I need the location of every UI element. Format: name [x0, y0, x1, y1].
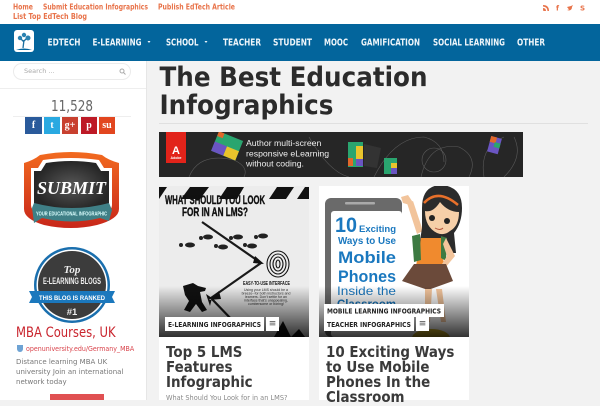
share buttons: t: [50, 120, 54, 131]
social icons top: [543, 4, 585, 12]
ad description: [16, 357, 123, 386]
top links: [13, 2, 235, 21]
navigation labels: MOOC: [324, 38, 348, 48]
device graphics: [348, 142, 381, 168]
navigation labels: SOCIAL LEARNING: [433, 38, 505, 48]
page title: The Best Education: [160, 62, 428, 93]
ad button: [50, 394, 104, 400]
top links: Submit Education Infographics: [43, 2, 148, 12]
card title: Infographic: [166, 373, 253, 391]
card title: [166, 343, 253, 391]
page title: Infographics: [160, 90, 334, 121]
navigation labels: TEACHER: [223, 38, 262, 48]
adobe logo: Adobe: [171, 156, 181, 160]
navigation labels: STUDENT: [273, 38, 312, 48]
navigation labels: [48, 38, 546, 48]
fingerprint: [267, 251, 289, 277]
LMS infographic image: breeze--for both instructors and: [242, 292, 290, 296]
phones illustration: [319, 186, 469, 337]
top bar: [0, 0, 600, 24]
adobe logo: A: [172, 145, 180, 157]
top links: List Top EdTech Blog: [13, 12, 87, 21]
share count: 11,528: [51, 97, 93, 115]
card title: [326, 343, 454, 406]
share buttons: g+: [65, 120, 75, 131]
share buttons: p: [86, 120, 92, 131]
ad title: MBA Courses, UK: [16, 325, 116, 341]
category tag: mobile learning: [324, 304, 444, 317]
tag icon: ≡: [269, 319, 276, 329]
card: LMS features: [159, 186, 309, 400]
navigation labels: SCHOOL: [166, 38, 198, 48]
girl: [401, 185, 462, 347]
card title: Classroom: [326, 388, 405, 406]
search box: Search ...: [24, 67, 55, 75]
share count: [13, 96, 131, 117]
phones illustration: Exciting: [359, 224, 396, 235]
LMS infographic image: learners. Don't settle for an: [245, 295, 287, 299]
ad description: network today: [16, 377, 67, 386]
ad block: [16, 325, 134, 400]
sidebar: [0, 61, 147, 400]
banner text: Author multi-screen: [246, 138, 321, 148]
card: mobile phones: [319, 186, 469, 400]
adobe logo: [166, 132, 186, 163]
submit badge: YOUR EDUCATIONAL INFOGRAPHIC: [36, 212, 107, 218]
navigation labels: EDTECH: [48, 38, 81, 48]
card title: Top 5 LMS: [166, 343, 242, 361]
submit badge: [24, 152, 119, 228]
phones illustration: Phones: [338, 267, 396, 286]
phones illustration: Classroom: [337, 297, 396, 311]
ad description: university Join an international: [16, 367, 123, 376]
phones illustration: Mobile: [338, 248, 396, 267]
LMS infographic image: FOR IN AN LMS?: [182, 205, 248, 219]
ad description: Distance learning MBA UK: [16, 357, 107, 366]
LMS infographic image: cumbersome or boring!: [248, 302, 284, 306]
card title: 10 Exciting Ways: [326, 343, 454, 361]
banner text: without coding.: [245, 158, 304, 168]
search box: [13, 63, 131, 80]
navigation labels: GAMIFICATION: [361, 38, 420, 48]
tag icon: ≡: [419, 319, 426, 329]
phones illustration: Ways to Use: [338, 236, 396, 247]
card title: Phones In the: [326, 373, 430, 391]
top links: Home: [13, 2, 33, 12]
card title: to Use Mobile: [326, 358, 429, 376]
ranking badge: Top: [64, 264, 81, 276]
LMS infographic image: [159, 186, 309, 337]
page title: [160, 62, 428, 121]
banner text: responsive eLearning: [246, 148, 329, 158]
phones illustration: 10: [335, 214, 357, 237]
submit badge: SUBMIT: [37, 178, 107, 198]
navigation bar: [0, 24, 600, 61]
detective: [183, 283, 207, 312]
logo: [14, 30, 34, 52]
card title: Features: [166, 358, 232, 376]
LMS infographic image: interface that's unappealing,: [244, 298, 288, 302]
LMS infographic image: Using your LMS should be a: [244, 288, 288, 292]
card excerpt: What Should You Look for in an LMS?: [166, 394, 287, 402]
ranking badge: [29, 247, 115, 323]
share buttons: [25, 117, 115, 134]
ranking badge: #1: [67, 307, 78, 318]
tag icon: [266, 317, 279, 331]
category tag: [165, 317, 264, 331]
navigation labels: E-LEARNING: [92, 38, 142, 48]
share buttons: f: [32, 120, 35, 131]
share buttons: su: [102, 120, 112, 131]
tag icon: [416, 317, 429, 331]
phones illustration: Inside the: [337, 284, 396, 298]
adobe banner: [159, 132, 523, 177]
navigation labels: OTHER: [517, 38, 546, 48]
category tag: teacher: [324, 317, 414, 331]
ranking badge: THIS BLOG IS RANKED: [39, 295, 105, 302]
tablet graphic: [211, 131, 243, 161]
ad url: openuniversity.edu/Germany_MBA: [26, 345, 134, 353]
